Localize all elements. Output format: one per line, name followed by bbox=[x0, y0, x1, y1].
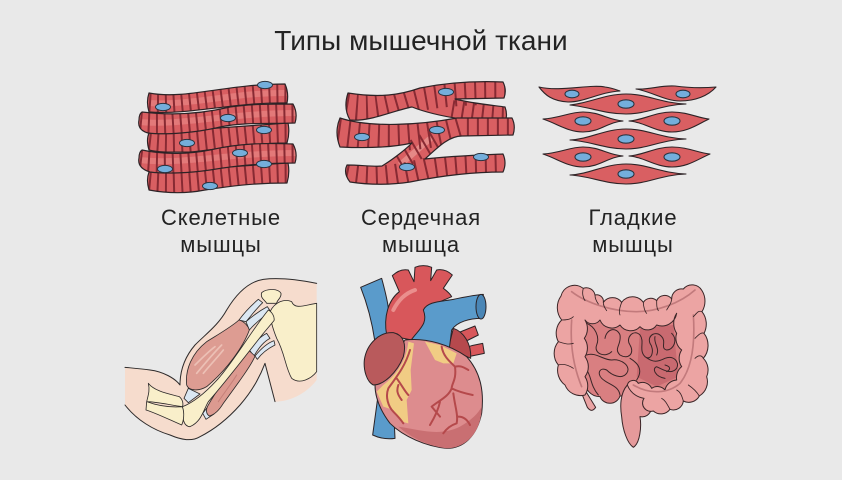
nuclei: smooth bbox=[565, 90, 690, 178]
arm skin bbox=[125, 279, 317, 440]
appendix bbox=[582, 392, 596, 410]
illustration: arm with biceps bbox=[125, 279, 317, 440]
tendons bbox=[184, 299, 275, 419]
coronary vessels bbox=[387, 347, 473, 433]
label: skeletal muscles: Скелетные bbox=[161, 205, 281, 230]
label: cardiac muscle: мышца bbox=[382, 232, 460, 257]
triceps muscle bbox=[206, 350, 255, 416]
label: cardiac muscle: Сердечная bbox=[361, 205, 481, 230]
label: skeletal muscles: мышцы bbox=[180, 232, 262, 257]
coronary fat bbox=[377, 342, 457, 423]
rectum bbox=[621, 385, 651, 447]
label: smooth muscles: мышцы bbox=[592, 232, 674, 257]
vena cava bbox=[361, 278, 395, 439]
colon bbox=[554, 285, 708, 414]
colon band bbox=[571, 290, 695, 392]
pulmonary artery bbox=[412, 294, 483, 348]
illustration: intestines bbox=[554, 285, 708, 447]
colon fold creases bbox=[558, 288, 704, 409]
small intestine bbox=[580, 310, 687, 403]
title: Типы мышечной ткани bbox=[274, 25, 568, 56]
panel: cardiac muscle fibers bbox=[337, 82, 514, 184]
pulmonary veins bbox=[457, 326, 484, 357]
nuclei: skeletal bbox=[156, 81, 272, 190]
biceps muscle bbox=[186, 320, 249, 390]
panel: smooth muscle cells bbox=[539, 86, 716, 184]
heart body bbox=[375, 339, 482, 448]
nuclei: cardiac bbox=[354, 88, 488, 171]
bones bbox=[261, 289, 281, 303]
aorta bbox=[386, 266, 452, 340]
label: smooth muscles: Гладкие bbox=[588, 205, 678, 230]
illustration: heart bbox=[361, 266, 486, 448]
right atrium bbox=[364, 333, 405, 385]
panel: skeletal muscle fibers bbox=[139, 81, 296, 193]
